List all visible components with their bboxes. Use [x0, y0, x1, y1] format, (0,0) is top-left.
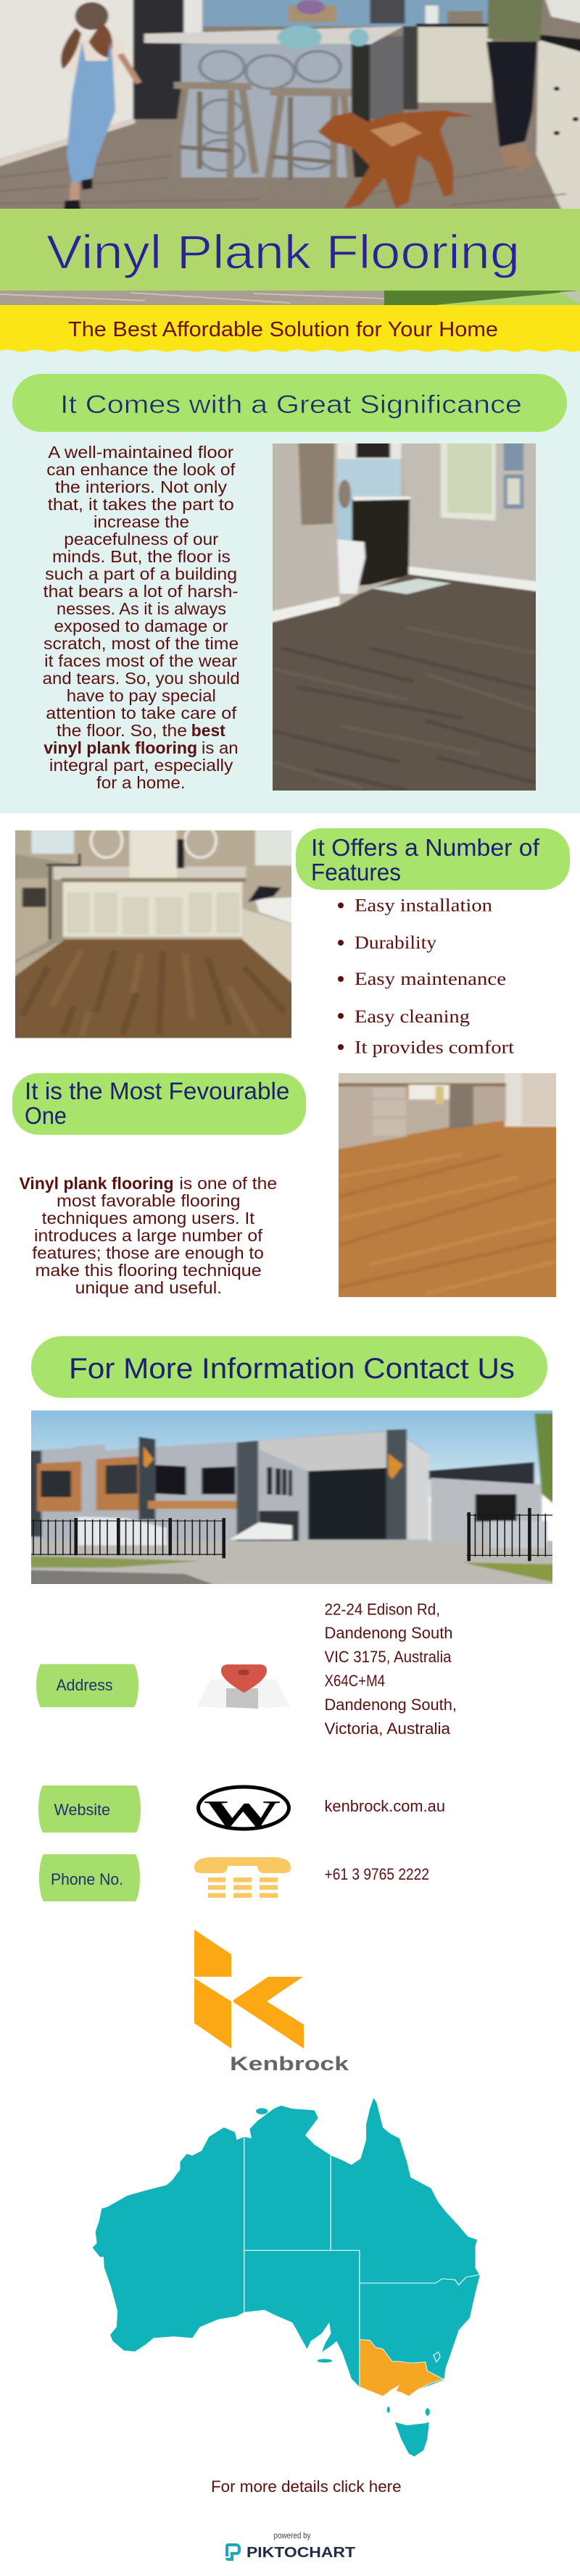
text block: most favourable paragraph: features; those are enough to: [32, 1243, 264, 1262]
text block: floor significance paragraph: best: [191, 721, 225, 740]
address text: Dandenong South: [325, 1624, 452, 1642]
photo: kitchen with honey plank floor: [339, 1073, 556, 1297]
subtitle ribbon: [0, 305, 580, 352]
text block: floor significance paragraph: vinyl plank flooring: [44, 738, 197, 757]
address text: X64C+M4: [325, 1672, 385, 1690]
features bullet list: Durability: [355, 933, 437, 953]
icon: map pin: [197, 1664, 290, 1709]
website label: Website: [54, 1801, 110, 1819]
phone label: [39, 1854, 140, 1901]
wood and green strip under title: [0, 291, 580, 305]
photo: bathroom with grey plank floor: [273, 443, 536, 791]
Piktochart footer logo: powered by: [274, 2530, 310, 2540]
icon: WordPress logo: [199, 1787, 289, 1835]
heading: For More Information Contact Us: For More Information Contact Us: [69, 1353, 515, 1385]
features bullet list: Easy installation: [355, 896, 493, 916]
icon: telephone: [194, 1857, 291, 1898]
subtitle ribbon: The Best Affordable Solution for Your Home: [68, 318, 498, 341]
features bullet list: Easy cleaning: [355, 1007, 471, 1027]
features bullet list: It provides comfort: [355, 1038, 514, 1058]
Kenbrock logo: Kenbrock: [230, 2053, 349, 2075]
text block: most favourable paragraph: Vinyl plank flooring: [19, 1174, 174, 1193]
Kenbrock logo: [194, 1930, 349, 2075]
text block: floor significance paragraph: increase the: [94, 512, 189, 531]
phone label: Phone No.: [51, 1870, 123, 1888]
text block: most favourable paragraph: unique and useful.: [75, 1278, 222, 1297]
text block: floor significance paragraph: can enhance the look of: [46, 460, 236, 479]
website label: [38, 1785, 141, 1833]
text block: floor significance paragraph: scratch, most of the time: [44, 634, 239, 653]
text block: floor significance paragraph: [43, 443, 240, 792]
heading: It Comes with a Great Significance: [12, 374, 567, 432]
Piktochart footer logo: [227, 2530, 355, 2561]
address text: Dandenong South,: [325, 1696, 457, 1714]
text block: most favourable paragraph: is one of the: [179, 1174, 277, 1193]
text block: floor significance paragraph: peacefulness of our: [64, 530, 218, 549]
address text: VIC 3175, Australia: [325, 1648, 452, 1666]
heading: It Offers a Number of Features: Features: [311, 859, 401, 885]
text block: floor significance paragraph: nesses. As it is always: [57, 599, 226, 618]
address text: 22-24 Edison Rd,: [325, 1600, 440, 1619]
text block: floor significance paragraph: that, it takes the part to: [48, 495, 234, 514]
text block: floor significance paragraph: have to pay special: [67, 686, 216, 705]
address text: [325, 1600, 457, 1738]
address label: [36, 1664, 138, 1707]
photo: Kenbrock warehouse building: [31, 1410, 552, 1584]
address label: Address: [57, 1676, 113, 1694]
text block: most favourable paragraph: most favorable flooring: [57, 1191, 241, 1210]
map of Australia with Victoria highlighted: [93, 2098, 480, 2456]
text block: floor significance paragraph: it faces most of the wear: [44, 651, 237, 670]
text block: most favourable paragraph: techniques among users. It: [42, 1209, 255, 1227]
heading: It Offers a Number of Features: It Offers a Number of: [311, 834, 540, 861]
text block: floor significance paragraph: the floor. So, the: [57, 721, 187, 740]
call to action text: For more details click here: [211, 2477, 402, 2496]
text block: floor significance paragraph: integral part, especially: [49, 756, 233, 775]
heading: It is the Most Fevourable One: One: [25, 1102, 67, 1129]
text block: floor significance paragraph: that bears a lot of harsh-: [44, 582, 239, 601]
hero photo: family in kitchen with dog: [0, 0, 580, 209]
title banner: [0, 209, 580, 291]
heading: For More Information Contact Us: [31, 1336, 547, 1398]
phone text: +61 3 9765 2222: [325, 1865, 429, 1883]
heading: It Comes with a Great Significance: It Comes with a Great Significance: [60, 391, 522, 419]
features bullet list: [338, 896, 514, 1058]
text block: floor significance paragraph: attention to take care of: [46, 704, 237, 722]
text block: floor significance paragraph: A well-maintained floor: [48, 443, 233, 462]
website text: kenbrock.com.au: [325, 1797, 445, 1815]
address text: Victoria, Australia: [325, 1720, 451, 1738]
text block: floor significance paragraph: for a home.: [96, 773, 186, 792]
text block: floor significance paragraph: exposed to damage or: [54, 617, 228, 635]
features bullet list: Easy maintenance: [355, 970, 506, 989]
text block: most favourable paragraph: make this flooring technique: [35, 1261, 262, 1280]
Piktochart footer logo: PIKTOCHART: [246, 2545, 355, 2561]
title banner: Vinyl Plank Flooring: [46, 225, 520, 278]
heading: It is the Most Fevourable One: [12, 1073, 306, 1135]
text block: floor significance paragraph: the interiors. Not only: [55, 478, 227, 496]
icon: WordPress logo: W: [204, 1793, 281, 1835]
heading: It Offers a Number of Features: [296, 828, 570, 890]
text block: floor significance paragraph: is an: [202, 738, 239, 757]
text block: most favourable paragraph: introduces a large number of: [34, 1226, 262, 1245]
text block: floor significance paragraph: such a part of a building: [45, 564, 237, 583]
heading: It is the Most Fevourable One: It is the Most Fevourable: [25, 1077, 289, 1104]
text block: floor significance paragraph: and tears. So, you should: [43, 669, 240, 688]
text block: most favourable paragraph: [19, 1174, 277, 1297]
photo: bathroom with brown plank floor: [15, 830, 291, 1038]
pale section background: [0, 341, 580, 813]
text block: floor significance paragraph: minds. But, the floor is: [52, 547, 231, 566]
